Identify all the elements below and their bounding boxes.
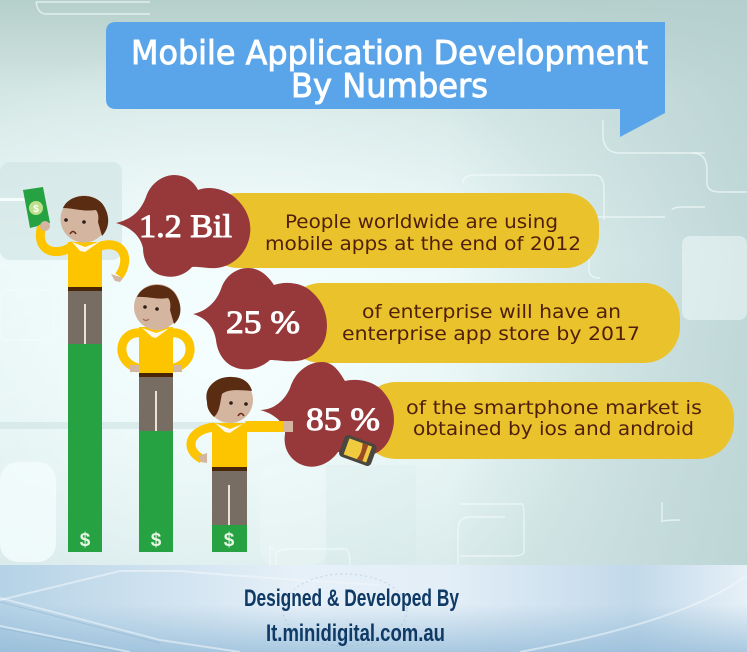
callout 2 [193,268,680,369]
bar 2: $ [151,530,162,551]
footer band [0,565,747,652]
stat bubble 1 [116,175,250,277]
description 2: of enterprise will have an [362,301,621,323]
description 3 [406,397,702,440]
icon: banknote: $ [33,204,39,215]
figure 1: tallest stack with banknote [23,187,125,552]
description 2: enterprise app store by 2017 [342,323,640,345]
stat bubble 3 [260,362,394,467]
bar 1 [68,344,102,552]
footer credit: It.minidigital.com.au [266,620,445,647]
description 3: obtained by ios and android [413,418,694,440]
footer credit [244,585,459,647]
bar 3 [212,525,247,552]
bar 1: $ [80,530,91,551]
icon: smartphone [338,434,378,467]
figure 3: short stack pointing [191,377,293,552]
bar 3: $ [224,530,235,551]
callout 3 [260,362,734,467]
title text [131,33,648,105]
description 2 [342,301,640,345]
footer credit: Designed & Developed By [244,585,459,612]
title banner [106,22,665,137]
description 1: mobile apps at the end of 2012 [265,233,581,255]
title text: Mobile Application Development [131,33,648,72]
description 1: People worldwide are using [285,211,558,233]
callout 1: 1.2 Bil [139,209,232,245]
bar 2 [139,431,173,552]
callout 2: 25 % [226,305,300,341]
callout 3: 85 % [306,402,380,438]
title text: By Numbers [291,66,488,105]
description 1 [265,211,581,255]
stat bubble 2 [193,268,327,369]
callout 1 [116,175,599,277]
figure 2: middle stack hands on hips [122,284,190,552]
description 3: of the smartphone market is [406,397,702,419]
icon: banknote [23,187,50,228]
